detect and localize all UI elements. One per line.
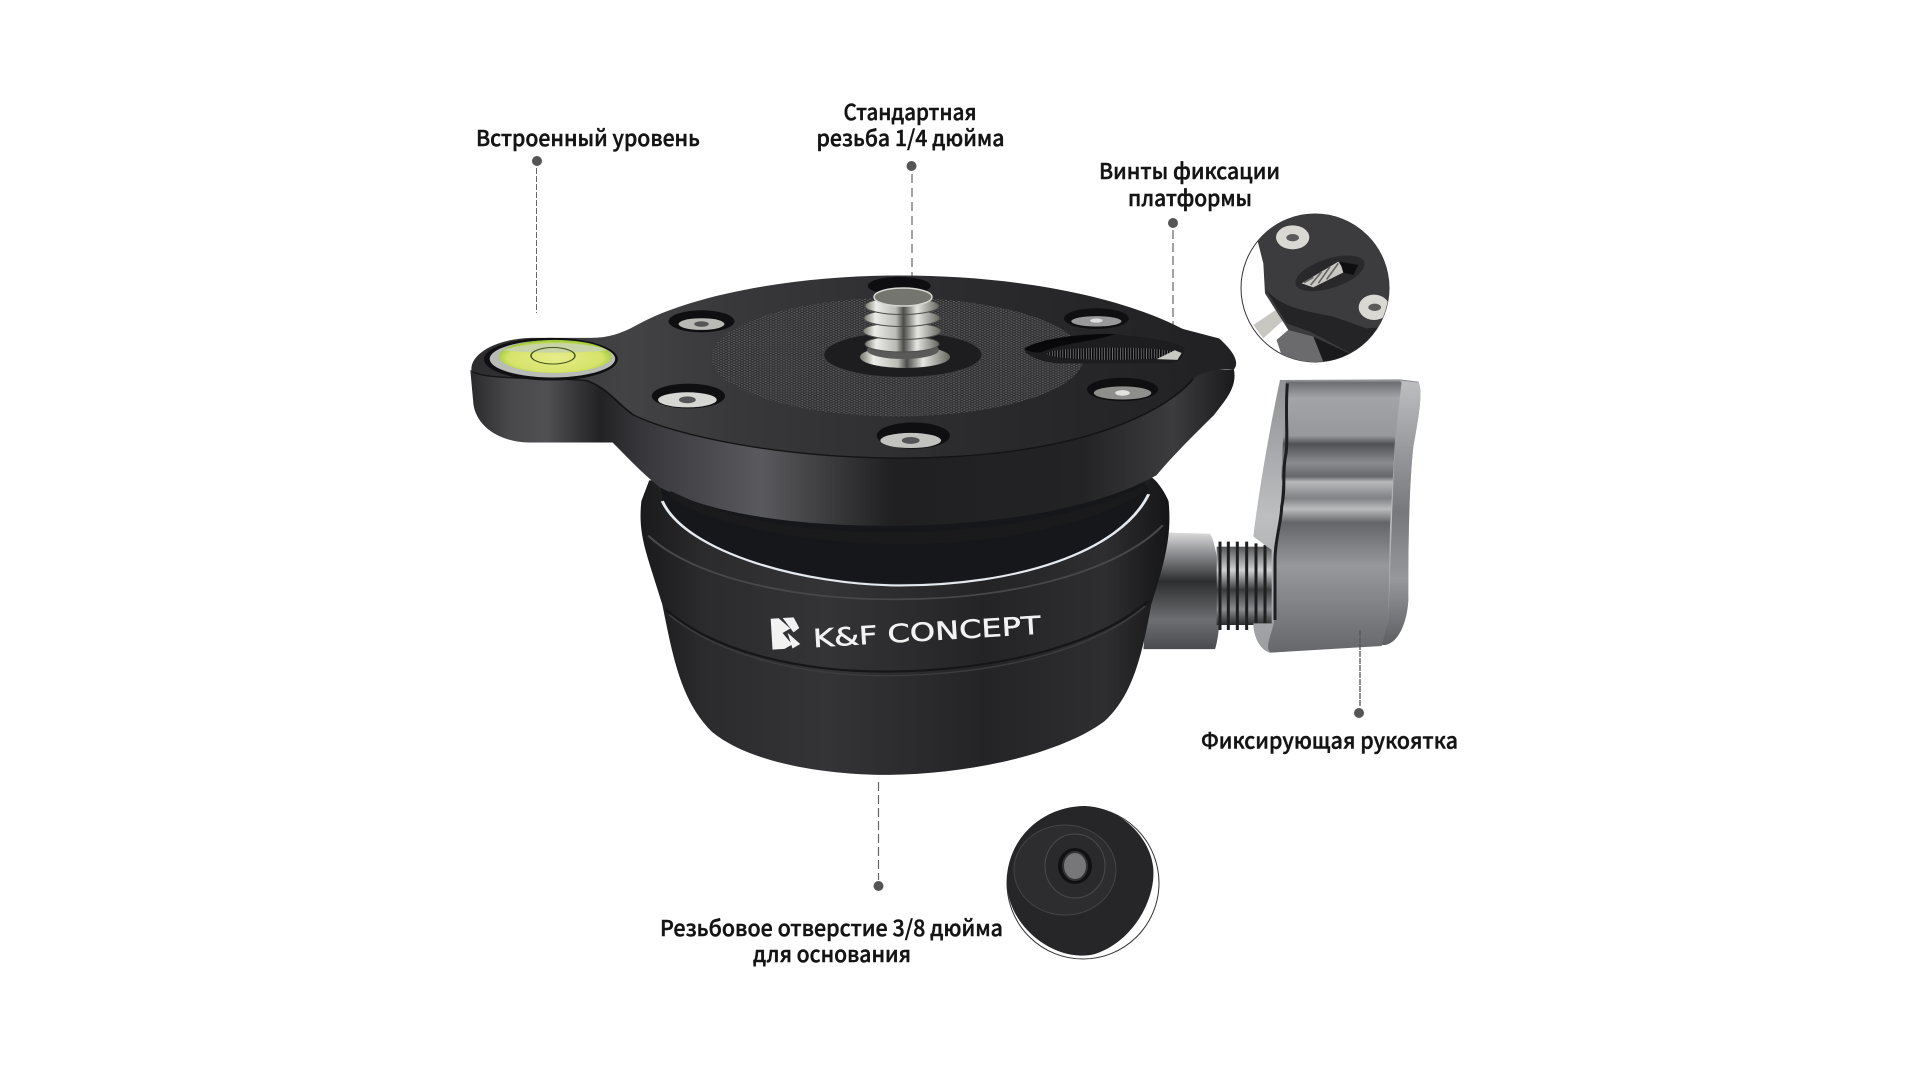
rear screw recess <box>868 277 931 295</box>
handle <box>1217 379 1420 653</box>
label: 3/8 thread hole: Резьбовое отверстие 3/8 дюйма <box>660 911 1003 943</box>
callout line: 3/8 thread hole <box>874 782 884 891</box>
label: platform lock screws: платформы <box>1128 181 1252 213</box>
centre recess <box>823 332 982 377</box>
callout line: platform screws <box>1168 218 1178 335</box>
label: locking handle: Фиксирующая рукоятка <box>1201 724 1458 756</box>
neck <box>660 474 1149 584</box>
label: platform lock screws <box>1099 154 1280 213</box>
label: standard 1/4 thread <box>816 95 1004 153</box>
label: standard 1/4 thread: резьба 1/4 дюйма <box>816 121 1004 153</box>
textured platform disc <box>711 298 1084 416</box>
callout line: locking handle <box>1354 630 1364 718</box>
label: built-in level: Встроенный уровень <box>476 121 700 153</box>
label: 3/8 thread hole <box>660 911 1003 969</box>
label: platform lock screws: Винты фиксации <box>1099 154 1280 186</box>
connector cylinder <box>1143 532 1220 649</box>
platform screws <box>652 308 1158 449</box>
inset: platform screw detail <box>1240 214 1390 362</box>
label: 3/8 thread hole: для основания <box>753 937 911 969</box>
locking screw slot <box>1024 334 1184 363</box>
leveling base body <box>470 275 1236 775</box>
1/4 inch stud <box>860 288 950 368</box>
brand logo <box>771 603 1042 656</box>
level vial <box>484 338 618 381</box>
callout line: built-in level <box>532 156 542 313</box>
inset: underside thread hole <box>1007 806 1159 959</box>
platform side band <box>470 370 1235 526</box>
callout line: standard thread <box>906 161 916 276</box>
label: standard 1/4 thread: Стандартная <box>844 95 976 127</box>
white ring <box>662 494 1149 585</box>
locking handle with threaded connector <box>1143 379 1420 653</box>
brand logo: K&F CONCEPT <box>812 611 1042 653</box>
top face <box>471 275 1236 458</box>
logo mark <box>771 617 800 650</box>
base cylinder <box>641 477 1169 775</box>
